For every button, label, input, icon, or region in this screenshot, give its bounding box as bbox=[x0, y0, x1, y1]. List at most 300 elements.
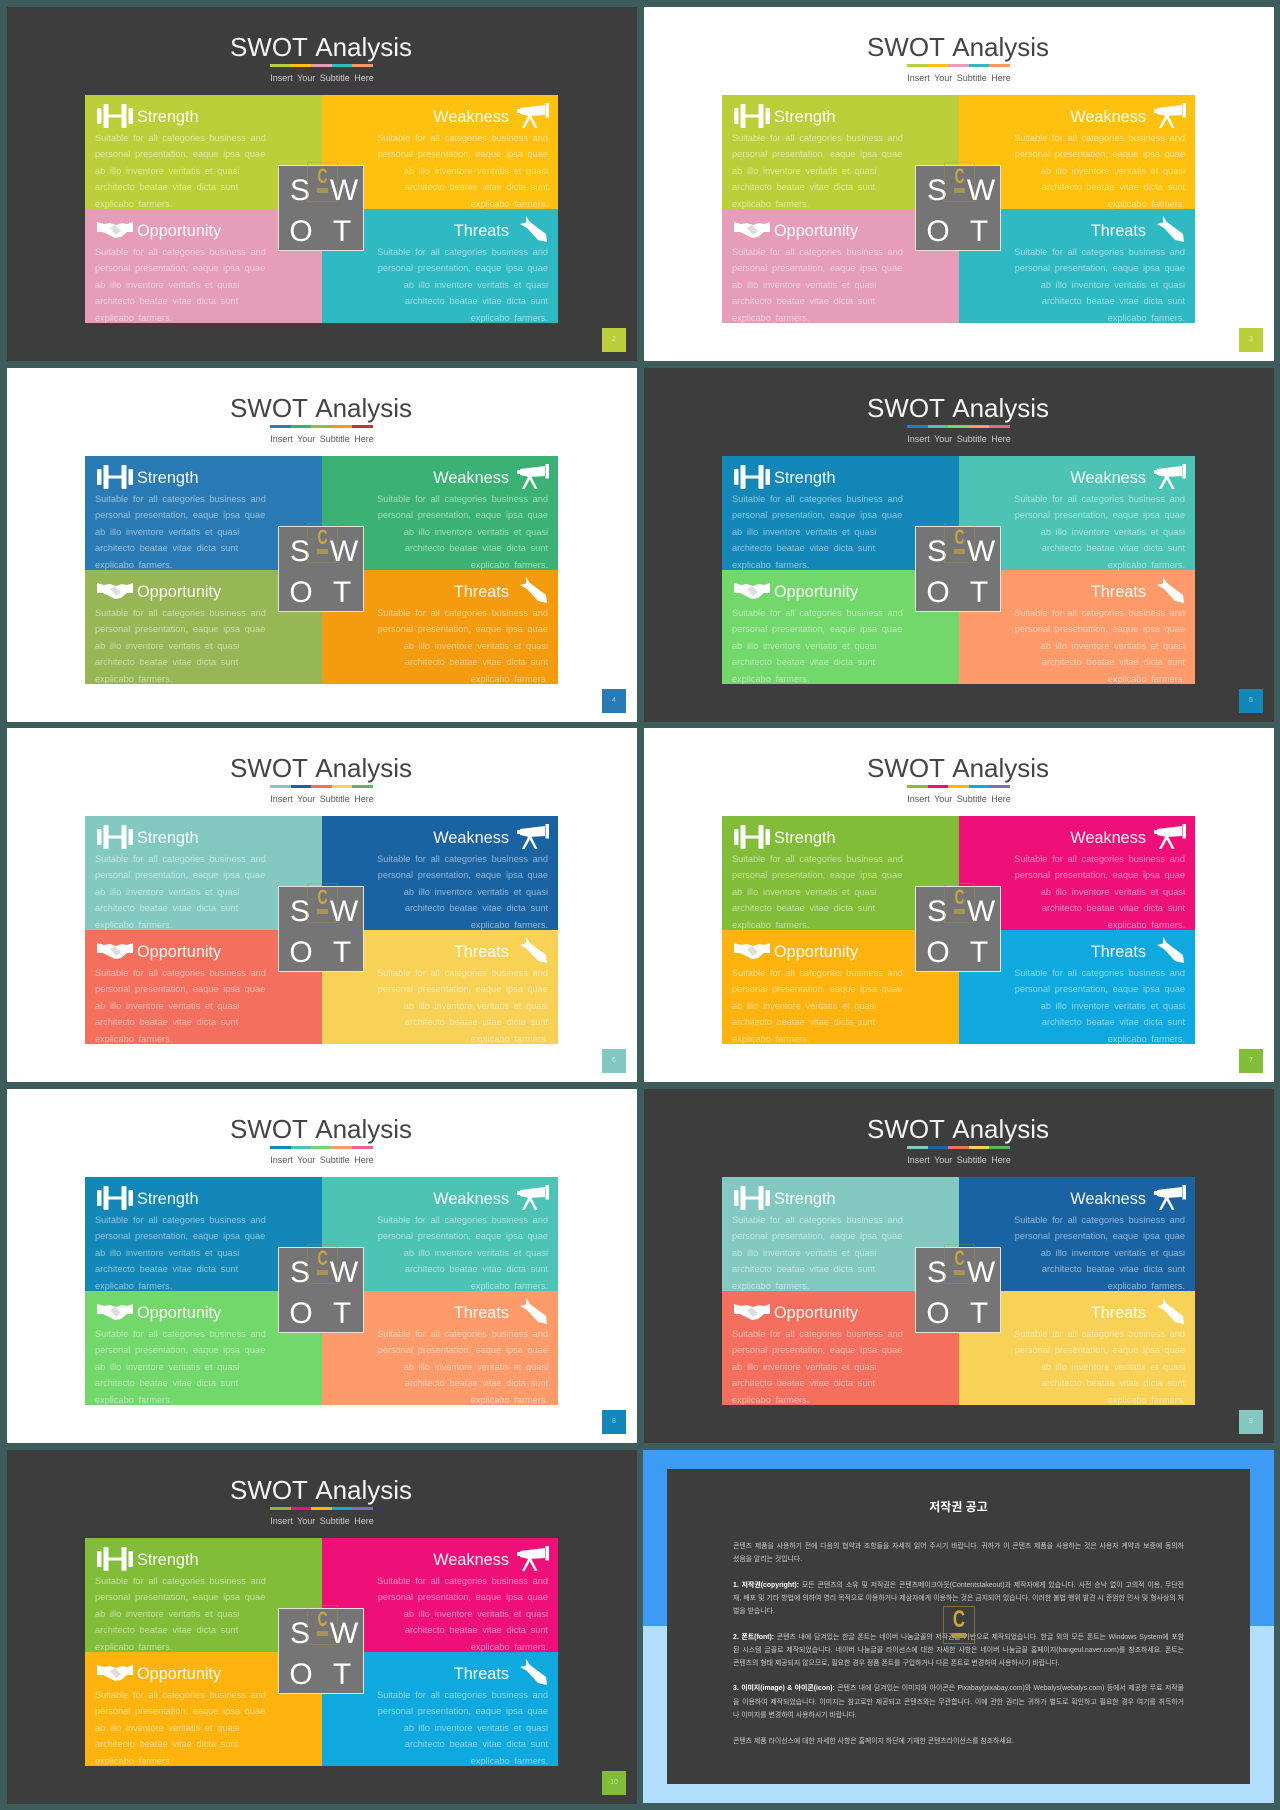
panel: opportunity bbox=[85, 930, 322, 1044]
centre SWOT box: W bbox=[967, 1256, 995, 1289]
panel: strength: Suitable for all categories business and bbox=[95, 1214, 266, 1224]
panel: opportunity: explicabo farmers. bbox=[95, 674, 172, 684]
centre SWOT box: C bbox=[955, 165, 964, 188]
clause 3: image and icon bbox=[733, 1684, 1184, 1719]
centre SWOT box: T bbox=[333, 215, 351, 248]
panel: opportunity: Opportunity bbox=[137, 222, 221, 240]
panel: weakness bbox=[959, 1177, 1195, 1291]
subtitle: Insert Your Subtitle Here bbox=[907, 794, 1011, 804]
panel: strength: Strength bbox=[774, 1190, 836, 1208]
panel: strength bbox=[722, 816, 959, 930]
panel: strength: Suitable for all categories business and bbox=[732, 1214, 903, 1224]
colour bar bbox=[270, 1507, 373, 1510]
panel: strength: personal presentation, eaque ipsa quae bbox=[95, 1592, 265, 1602]
SWOT grid bbox=[722, 456, 1195, 684]
panel: strength: explicabo farmers. bbox=[95, 198, 172, 208]
panel: weakness: explicabo farmers. bbox=[471, 1280, 548, 1290]
panel: weakness: ab illo inventore veritatis et quasi bbox=[404, 1608, 548, 1618]
SWOT grid bbox=[722, 1177, 1195, 1405]
centre SWOT box: W bbox=[330, 535, 358, 568]
panel: threats: Threats bbox=[1091, 943, 1146, 961]
panel: strength: explicabo farmers. bbox=[95, 560, 172, 570]
centre SWOT box: C bbox=[318, 1608, 327, 1631]
panel: opportunity: Opportunity bbox=[137, 583, 221, 601]
panel: strength: architecto beatae vitae dicta sunt bbox=[95, 543, 238, 553]
panel: threats: architecto beatae vitae dicta sunt bbox=[405, 1378, 548, 1388]
panel: opportunity: architecto beatae vitae dicta sunt bbox=[732, 296, 875, 306]
panel: threats bbox=[322, 930, 558, 1044]
panel: weakness: Suitable for all categories business and bbox=[1014, 854, 1185, 864]
intro paragraph bbox=[733, 1542, 1184, 1563]
panel: threats: ab illo inventore veritatis et quasi bbox=[1041, 1362, 1185, 1372]
panel: weakness: explicabo farmers. bbox=[1108, 920, 1185, 930]
panel: weakness: Suitable for all categories business and bbox=[377, 1576, 548, 1586]
panel: weakness: Suitable for all categories business and bbox=[1014, 132, 1185, 142]
clause 3: image and icon: 을 이용하여 제작되었습니다. 이미지는 참고로만 제공되고 콘텐츠와는 무관합니다. 이에 관한 권리는 귀하가 별도로 확인하고 필요한 경우 여기를 취득하거 bbox=[733, 1699, 1184, 1706]
panel: weakness: explicabo farmers. bbox=[471, 560, 548, 570]
panel: weakness: personal presentation, eaque ipsa quae bbox=[378, 1231, 548, 1241]
panel: weakness: Weakness bbox=[1070, 1190, 1146, 1208]
page number: 7 bbox=[1249, 1057, 1253, 1064]
page number bbox=[602, 1771, 626, 1795]
panel: strength: Suitable for all categories business and bbox=[95, 132, 266, 142]
panel: opportunity: personal presentation, eaque ipsa quae bbox=[95, 984, 265, 994]
clause 3: image and icon: 3. 이미지(image) & 아이콘(icon): 콘텐츠 내에 담겨있는 이미지와 아이콘은 Pixabay(pixabay.com)와 Webalys(webalys.com) 등에서 제공한 무료 저작물 bbox=[733, 1685, 1184, 1692]
intro paragraph: 셨음을 알리는 것입니다. bbox=[733, 1556, 802, 1563]
panel: threats: Threats bbox=[454, 583, 509, 601]
panel: weakness: architecto beatae vitae dicta sunt bbox=[405, 543, 548, 553]
panel: opportunity: Suitable for all categories business and bbox=[732, 968, 903, 978]
centre SWOT box: T bbox=[970, 576, 988, 609]
panel: threats: explicabo farmers. bbox=[471, 312, 548, 322]
panel: threats: ab illo inventore veritatis et quasi bbox=[404, 640, 548, 650]
panel: weakness bbox=[322, 816, 558, 930]
subtitle: Insert Your Subtitle Here bbox=[270, 1516, 374, 1526]
panel: weakness: personal presentation, eaque ipsa quae bbox=[378, 1592, 548, 1602]
panel: threats: explicabo farmers. bbox=[471, 1394, 548, 1404]
colour bar bbox=[907, 425, 1010, 428]
panel: opportunity bbox=[85, 209, 322, 323]
panel: opportunity bbox=[722, 570, 959, 684]
panel: strength: Strength bbox=[137, 1190, 199, 1208]
page number bbox=[602, 1049, 626, 1073]
panel: strength bbox=[722, 456, 959, 570]
logo badge: C bbox=[953, 1606, 965, 1633]
clause 1: copyright bbox=[733, 1581, 1184, 1615]
panel: strength bbox=[85, 95, 322, 209]
panel: strength: Suitable for all categories business and bbox=[732, 132, 903, 142]
panel: weakness: personal presentation, eaque ipsa quae bbox=[1015, 510, 1185, 520]
centre SWOT box: O bbox=[289, 936, 313, 969]
panel: opportunity: Suitable for all categories business and bbox=[95, 968, 266, 978]
subtitle: Insert Your Subtitle Here bbox=[907, 1154, 1011, 1164]
panel: weakness: architecto beatae vitae dicta sunt bbox=[1042, 903, 1185, 913]
panel: threats: ab illo inventore veritatis et quasi bbox=[1041, 1000, 1185, 1010]
panel: strength: ab illo inventore veritatis et quasi bbox=[732, 1248, 876, 1258]
panel: opportunity: architecto beatae vitae dicta sunt bbox=[95, 1017, 238, 1027]
centre SWOT box: T bbox=[333, 936, 351, 969]
panel: threats: architecto beatae vitae dicta sunt bbox=[1042, 1017, 1185, 1027]
panel: weakness bbox=[959, 95, 1195, 209]
panel: strength: personal presentation, eaque ipsa quae bbox=[732, 510, 902, 520]
panel: opportunity: ab illo inventore veritatis et quasi bbox=[95, 1000, 239, 1010]
page number: 10 bbox=[610, 1779, 618, 1786]
panel: opportunity: explicabo farmers. bbox=[732, 1034, 809, 1044]
panel: threats bbox=[322, 1652, 558, 1766]
panel: strength: Strength bbox=[774, 829, 836, 847]
panel: strength: ab illo inventore veritatis et quasi bbox=[95, 526, 239, 536]
panel: threats: Suitable for all categories business and bbox=[377, 1328, 548, 1338]
panel: opportunity bbox=[85, 1291, 322, 1405]
panel: strength: ab illo inventore veritatis et quasi bbox=[732, 886, 876, 896]
centre SWOT box: W bbox=[967, 895, 995, 928]
panel: strength: ab illo inventore veritatis et quasi bbox=[732, 166, 876, 176]
slide 2: dark, lime palette bbox=[7, 7, 637, 361]
panel: weakness: architecto beatae vitae dicta sunt bbox=[405, 903, 548, 913]
page number bbox=[1239, 1410, 1263, 1434]
subtitle: Insert Your Subtitle Here bbox=[270, 72, 374, 82]
panel: weakness bbox=[322, 1538, 558, 1652]
centre SWOT box: O bbox=[926, 576, 950, 609]
panel: strength: Strength bbox=[137, 829, 199, 847]
panel: threats: explicabo farmers. bbox=[471, 1756, 548, 1766]
SWOT grid bbox=[85, 816, 558, 1044]
panel: threats: architecto beatae vitae dicta sunt bbox=[1042, 296, 1185, 306]
panel: threats: ab illo inventore veritatis et quasi bbox=[404, 1362, 548, 1372]
title: SWOT Analysis bbox=[230, 1475, 412, 1505]
panel: strength bbox=[85, 1177, 322, 1291]
panel: threats: personal presentation, eaque ipsa quae bbox=[378, 1345, 548, 1355]
centre SWOT box bbox=[278, 526, 364, 612]
panel: strength: personal presentation, eaque ipsa quae bbox=[95, 1231, 265, 1241]
panel: opportunity bbox=[85, 570, 322, 684]
colour bar bbox=[270, 785, 373, 788]
panel: opportunity bbox=[722, 209, 959, 323]
panel: opportunity: explicabo farmers. bbox=[732, 312, 809, 322]
panel: weakness: ab illo inventore veritatis et quasi bbox=[1041, 1248, 1185, 1258]
slide 6: white, coral palette bbox=[7, 728, 637, 1082]
panel: threats: explicabo farmers. bbox=[471, 674, 548, 684]
panel: opportunity: Suitable for all categories business and bbox=[732, 246, 903, 256]
panel: opportunity: explicabo farmers. bbox=[95, 1394, 172, 1404]
slide 4: white, blue-green palette bbox=[7, 368, 637, 722]
panel: threats: architecto beatae vitae dicta sunt bbox=[405, 1739, 548, 1749]
title: SWOT Analysis bbox=[230, 1114, 412, 1144]
panel: weakness: personal presentation, eaque ipsa quae bbox=[1015, 149, 1185, 159]
panel: weakness: architecto beatae vitae dicta sunt bbox=[405, 1264, 548, 1274]
centre SWOT box: T bbox=[333, 576, 351, 609]
logo badge bbox=[943, 1606, 975, 1644]
panel: weakness bbox=[959, 816, 1195, 930]
panel: weakness bbox=[322, 1177, 558, 1291]
panel: strength: Suitable for all categories business and bbox=[95, 854, 266, 864]
panel: strength: explicabo farmers. bbox=[95, 920, 172, 930]
page number bbox=[1239, 1049, 1263, 1073]
closing line: 콘텐츠 제품 라이선스에 대한 자세한 사항은 홈페이지 하단에 기재한 콘텐츠라이선스를 참조하세요. bbox=[733, 1738, 1014, 1745]
panel: strength: Suitable for all categories business and bbox=[732, 854, 903, 864]
panel: opportunity: personal presentation, eaque ipsa quae bbox=[95, 1706, 265, 1716]
panel: strength: personal presentation, eaque ipsa quae bbox=[95, 149, 265, 159]
centre SWOT box: O bbox=[289, 1658, 313, 1691]
panel: weakness: Suitable for all categories business and bbox=[1014, 494, 1185, 504]
panel: strength: architecto beatae vitae dicta sunt bbox=[732, 903, 875, 913]
panel: weakness: Suitable for all categories business and bbox=[377, 132, 548, 142]
panel: weakness: architecto beatae vitae dicta sunt bbox=[1042, 1264, 1185, 1274]
title: SWOT Analysis bbox=[230, 32, 412, 62]
clause 2: font bbox=[733, 1633, 1184, 1667]
panel: threats: Suitable for all categories business and bbox=[1014, 246, 1185, 256]
panel: weakness: Weakness bbox=[433, 108, 509, 126]
clause 2: font: 2. 폰트(font): 콘텐츠 내에 담겨있는 한글 폰트는 네이버 나눔글꼴의 저작권을 기반으로 제작되었습니다. 한글 외의 모든 폰트는 Windows System에 포함 bbox=[733, 1634, 1184, 1641]
panel: opportunity: Suitable for all categories business and bbox=[95, 246, 266, 256]
panel: weakness: Weakness bbox=[1070, 469, 1146, 487]
centre SWOT box: S bbox=[290, 1256, 310, 1289]
panel: opportunity bbox=[85, 1652, 322, 1766]
panel: opportunity: architecto beatae vitae dicta sunt bbox=[95, 657, 238, 667]
panel: weakness: explicabo farmers. bbox=[471, 198, 548, 208]
panel: opportunity: Opportunity bbox=[774, 943, 858, 961]
colour bar bbox=[907, 785, 1010, 788]
panel: strength: explicabo farmers. bbox=[732, 920, 809, 930]
panel: opportunity: explicabo farmers. bbox=[732, 674, 809, 684]
panel: opportunity: personal presentation, eaque ipsa quae bbox=[95, 263, 265, 273]
centre SWOT box bbox=[915, 1247, 1001, 1333]
panel: weakness: Suitable for all categories business and bbox=[377, 1214, 548, 1224]
SWOT grid bbox=[722, 95, 1195, 323]
panel: opportunity: ab illo inventore veritatis et quasi bbox=[95, 1362, 239, 1372]
panel: threats: personal presentation, eaque ipsa quae bbox=[378, 984, 548, 994]
panel: strength: Strength bbox=[137, 1551, 199, 1569]
panel: threats: architecto beatae vitae dicta sunt bbox=[405, 657, 548, 667]
colour bar bbox=[907, 64, 1010, 67]
centre SWOT box bbox=[278, 1608, 364, 1694]
panel: strength: explicabo farmers. bbox=[732, 1280, 809, 1290]
page number: 2 bbox=[612, 336, 616, 343]
panel: weakness: Suitable for all categories business and bbox=[1014, 1214, 1185, 1224]
panel: threats: Threats bbox=[454, 1665, 509, 1683]
SWOT grid bbox=[85, 1177, 558, 1405]
panel: weakness: personal presentation, eaque ipsa quae bbox=[1015, 1231, 1185, 1241]
panel: strength: architecto beatae vitae dicta sunt bbox=[732, 543, 875, 553]
panel: weakness: Weakness bbox=[433, 1551, 509, 1569]
centre SWOT box: W bbox=[967, 535, 995, 568]
centre SWOT box: C bbox=[318, 886, 327, 909]
slide 8: white, aqua palette bbox=[7, 1089, 637, 1443]
clause 1: copyright: 재, 배포 및 기타 방법에 의하여 영리 목적으로 이용하거나 제삼자에게 이용하는 것은 금지되어 있습니다. 이러한 불법 행위 발견 시 준엄한 민사 및 형사상의 처 bbox=[733, 1595, 1184, 1602]
panel: threats: personal presentation, eaque ipsa quae bbox=[378, 1706, 548, 1716]
panel: opportunity: personal presentation, eaque ipsa quae bbox=[732, 984, 902, 994]
centre SWOT box: C bbox=[955, 526, 964, 549]
panel: threats: explicabo farmers. bbox=[471, 1034, 548, 1044]
panel: strength: Strength bbox=[137, 108, 199, 126]
panel: opportunity: Suitable for all categories business and bbox=[732, 608, 903, 618]
panel: strength: ab illo inventore veritatis et quasi bbox=[95, 166, 239, 176]
panel: opportunity: Opportunity bbox=[774, 1304, 858, 1322]
centre SWOT box: C bbox=[318, 526, 327, 549]
centre SWOT box bbox=[915, 886, 1001, 972]
panel: weakness: explicabo farmers. bbox=[1108, 560, 1185, 570]
panel: weakness: Weakness bbox=[1070, 829, 1146, 847]
heading: 저작권 공고 bbox=[929, 1500, 988, 1514]
panel: threats: Suitable for all categories business and bbox=[1014, 968, 1185, 978]
subtitle: Insert Your Subtitle Here bbox=[270, 1154, 374, 1164]
panel: strength: architecto beatae vitae dicta sunt bbox=[95, 1264, 238, 1274]
panel: opportunity: explicabo farmers. bbox=[95, 312, 172, 322]
panel: threats: personal presentation, eaque ipsa quae bbox=[1015, 984, 1185, 994]
panel: strength bbox=[722, 1177, 959, 1291]
page number: 8 bbox=[612, 1418, 616, 1425]
SWOT grid bbox=[85, 95, 558, 323]
panel: opportunity: explicabo farmers. bbox=[95, 1034, 172, 1044]
panel: weakness: personal presentation, eaque ipsa quae bbox=[378, 149, 548, 159]
title: SWOT Analysis bbox=[867, 393, 1049, 423]
panel: threats: personal presentation, eaque ipsa quae bbox=[1015, 624, 1185, 634]
panel: threats: Suitable for all categories business and bbox=[1014, 1328, 1185, 1338]
panel: weakness: explicabo farmers. bbox=[471, 920, 548, 930]
centre SWOT box: C bbox=[955, 1247, 964, 1270]
centre SWOT box bbox=[278, 1247, 364, 1333]
colour bar bbox=[270, 64, 373, 67]
subtitle: Insert Your Subtitle Here bbox=[907, 72, 1011, 82]
centre SWOT box: O bbox=[289, 576, 313, 609]
panel: threats: architecto beatae vitae dicta sunt bbox=[405, 1017, 548, 1027]
clause 3: image and icon: 나 이미지를 변경하여 사용하시기 바랍니다. bbox=[733, 1712, 857, 1719]
centre SWOT box: C bbox=[318, 1247, 327, 1270]
centre SWOT box: W bbox=[330, 1617, 358, 1650]
panel: threats: Suitable for all categories business and bbox=[1014, 608, 1185, 618]
colour bar bbox=[907, 1146, 1010, 1149]
centre SWOT box: O bbox=[926, 215, 950, 248]
centre SWOT box: T bbox=[970, 215, 988, 248]
panel: threats: architecto beatae vitae dicta sunt bbox=[1042, 1378, 1185, 1388]
centre SWOT box: S bbox=[927, 174, 947, 207]
panel: opportunity: Suitable for all categories business and bbox=[95, 608, 266, 618]
SWOT grid bbox=[85, 1538, 558, 1766]
panel: opportunity: architecto beatae vitae dicta sunt bbox=[95, 296, 238, 306]
SWOT grid bbox=[85, 456, 558, 684]
SWOT grid bbox=[722, 816, 1195, 1044]
panel: strength: explicabo farmers. bbox=[732, 560, 809, 570]
centre SWOT box: S bbox=[290, 535, 310, 568]
centre SWOT box: T bbox=[333, 1658, 351, 1691]
subtitle: Insert Your Subtitle Here bbox=[907, 434, 1011, 444]
panel: weakness: ab illo inventore veritatis et quasi bbox=[404, 886, 548, 896]
panel: opportunity: personal presentation, eaque ipsa quae bbox=[95, 1345, 265, 1355]
panel: opportunity: ab illo inventore veritatis et quasi bbox=[95, 1722, 239, 1732]
panel: weakness: Weakness bbox=[433, 829, 509, 847]
panel: weakness: ab illo inventore veritatis et quasi bbox=[1041, 886, 1185, 896]
centre SWOT box: S bbox=[290, 895, 310, 928]
panel: threats: personal presentation, eaque ipsa quae bbox=[378, 624, 548, 634]
clause 2: font: 콘텐츠의 형태 제공되지 않으므로, 필요한 경우 정품 폰트를 구입하거나 다른 폰트로 변경하여 사용하시기 바랍니다. bbox=[733, 1660, 1060, 1667]
centre SWOT box bbox=[278, 165, 364, 251]
panel: opportunity: Suitable for all categories business and bbox=[732, 1328, 903, 1338]
panel: threats: architecto beatae vitae dicta sunt bbox=[405, 296, 548, 306]
panel: strength bbox=[85, 816, 322, 930]
panel: weakness: explicabo farmers. bbox=[1108, 198, 1185, 208]
panel: weakness: Weakness bbox=[433, 469, 509, 487]
panel: weakness: Suitable for all categories business and bbox=[377, 854, 548, 864]
panel: strength: Strength bbox=[774, 108, 836, 126]
panel: weakness: explicabo farmers. bbox=[1108, 1280, 1185, 1290]
centre SWOT box: T bbox=[333, 1297, 351, 1330]
panel: strength: ab illo inventore veritatis et quasi bbox=[732, 526, 876, 536]
panel: opportunity: ab illo inventore veritatis et quasi bbox=[732, 1362, 876, 1372]
panel: weakness bbox=[322, 95, 558, 209]
page number bbox=[602, 689, 626, 713]
panel: weakness bbox=[959, 456, 1195, 570]
panel: opportunity: ab illo inventore veritatis et quasi bbox=[732, 1000, 876, 1010]
title: SWOT Analysis bbox=[230, 753, 412, 783]
centre SWOT box bbox=[278, 886, 364, 972]
page number bbox=[602, 328, 626, 352]
colour bar bbox=[270, 1146, 373, 1149]
panel: opportunity: ab illo inventore veritatis et quasi bbox=[732, 280, 876, 290]
panel: opportunity: explicabo farmers. bbox=[95, 1756, 172, 1766]
centre SWOT box: W bbox=[330, 174, 358, 207]
panel: opportunity: Opportunity bbox=[137, 943, 221, 961]
slide 10: dark, vivid palette bbox=[7, 1450, 637, 1804]
subtitle: Insert Your Subtitle Here bbox=[270, 794, 374, 804]
panel: weakness: architecto beatae vitae dicta sunt bbox=[1042, 182, 1185, 192]
panel: weakness: ab illo inventore veritatis et quasi bbox=[1041, 526, 1185, 536]
panel: weakness: personal presentation, eaque ipsa quae bbox=[378, 510, 548, 520]
panel: threats: explicabo farmers. bbox=[1108, 1394, 1185, 1404]
panel: threats: Threats bbox=[1091, 1304, 1146, 1322]
panel: opportunity: personal presentation, eaque ipsa quae bbox=[732, 263, 902, 273]
page number bbox=[1239, 689, 1263, 713]
panel: opportunity: ab illo inventore veritatis et quasi bbox=[732, 640, 876, 650]
title: SWOT Analysis bbox=[230, 393, 412, 423]
panel: threats: ab illo inventore veritatis et quasi bbox=[404, 1000, 548, 1010]
panel: opportunity: Opportunity bbox=[774, 583, 858, 601]
panel: strength: architecto beatae vitae dicta sunt bbox=[95, 903, 238, 913]
page number bbox=[1239, 328, 1263, 352]
panel: opportunity: architecto beatae vitae dicta sunt bbox=[95, 1739, 238, 1749]
panel: threats bbox=[322, 1291, 558, 1405]
panel: opportunity: Opportunity bbox=[137, 1304, 221, 1322]
panel: threats: Suitable for all categories business and bbox=[377, 968, 548, 978]
panel: opportunity bbox=[722, 1291, 959, 1405]
centre SWOT box: C bbox=[955, 886, 964, 909]
clause 1: copyright: 벌을 받습니다. bbox=[733, 1608, 775, 1615]
panel: strength: personal presentation, eaque ipsa quae bbox=[95, 510, 265, 520]
centre SWOT box: O bbox=[926, 936, 950, 969]
page number bbox=[602, 1410, 626, 1434]
panel: threats: personal presentation, eaque ipsa quae bbox=[1015, 263, 1185, 273]
panel: strength: Suitable for all categories business and bbox=[95, 494, 266, 504]
panel: strength: Suitable for all categories business and bbox=[732, 494, 903, 504]
panel: opportunity: architecto beatae vitae dicta sunt bbox=[732, 1378, 875, 1388]
panel: weakness: Suitable for all categories business and bbox=[377, 494, 548, 504]
panel: opportunity: architecto beatae vitae dicta sunt bbox=[95, 1378, 238, 1388]
panel: strength: explicabo farmers. bbox=[732, 198, 809, 208]
clause 1: copyright: 1. 저작권(copyright): 모든 콘텐츠의 소유 및 저작권은 콘텐츠메이크아웃(Contentstakeout)과 제작자에게 있습니다. 사전 승낙 없이 고의적 이용, 무단전 bbox=[733, 1582, 1184, 1589]
panel: opportunity: ab illo inventore veritatis et quasi bbox=[95, 640, 239, 650]
copyright notice slide bbox=[643, 1450, 1274, 1803]
page number: 3 bbox=[1249, 336, 1253, 343]
panel: threats bbox=[322, 570, 558, 684]
centre SWOT box: C bbox=[318, 165, 327, 188]
panel: strength: architecto beatae vitae dicta sunt bbox=[732, 182, 875, 192]
panel: opportunity: Suitable for all categories business and bbox=[95, 1328, 266, 1338]
clause 2: font: 된 시스템 글꼴로 제작되었습니다. 네이버 나눔글꼴 라이선스에 대한 자세한 사항은 네이버 나눔글꼴 홈페이지(hangeul.naver.com)를 참조하세요. 폰트는 bbox=[733, 1647, 1184, 1654]
panel: weakness: personal presentation, eaque ipsa quae bbox=[1015, 870, 1185, 880]
panel: opportunity: Opportunity bbox=[774, 222, 858, 240]
panel: threats: ab illo inventore veritatis et quasi bbox=[404, 280, 548, 290]
title: SWOT Analysis bbox=[867, 32, 1049, 62]
panel: threats: ab illo inventore veritatis et quasi bbox=[404, 1722, 548, 1732]
